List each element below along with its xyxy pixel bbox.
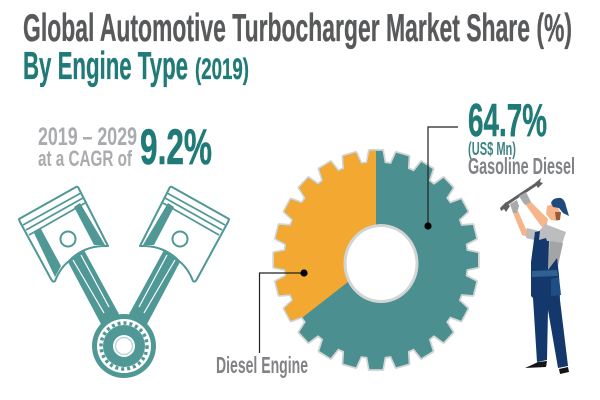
arms: [513, 201, 548, 238]
CAGR callout: 2019 – 2029: [38, 123, 137, 151]
CAGR callout: at a CAGR of: [38, 146, 132, 171]
gasoline label: (US$ Mn): [468, 139, 516, 159]
overall waistband: [532, 270, 558, 277]
title: (2019): [195, 53, 249, 86]
shirt side shading: [548, 241, 563, 270]
right piston head: [140, 187, 229, 282]
leader: diesel: [260, 269, 308, 353]
left piston head: [19, 187, 108, 282]
overalls and trousers: [531, 231, 568, 368]
title: By Engine Type: [23, 45, 188, 88]
hair: [555, 212, 561, 220]
CAGR callout: 9.2%: [140, 119, 212, 175]
gear outline: [274, 151, 478, 369]
overall pocket: [551, 277, 561, 296]
illustration: mechanic: [500, 178, 569, 374]
left piston skirt band: [34, 229, 61, 277]
leader: gasoline: [424, 127, 458, 230]
crankshaft hub gear: [92, 314, 156, 378]
shirt: [526, 224, 566, 270]
right piston connecting rod: [128, 250, 180, 326]
left piston connecting rod: [68, 250, 120, 326]
wrench: [500, 178, 543, 212]
diesel label: Diesel Engine: [216, 352, 308, 378]
gloves: [510, 192, 531, 213]
gear centre hole: [344, 224, 418, 303]
shoes: [525, 361, 569, 374]
slice: gasoline engine 64.7%: [274, 151, 478, 369]
slice: diesel engine: [274, 150, 376, 321]
cap: [551, 198, 569, 216]
gear donut chart: [274, 151, 478, 369]
gasoline label: [468, 94, 575, 179]
gasoline label: 64.7%: [468, 94, 547, 146]
icon: engine pistons: [19, 187, 229, 378]
CAGR callout: [38, 119, 212, 175]
title: [23, 7, 572, 88]
head: [546, 203, 561, 221]
